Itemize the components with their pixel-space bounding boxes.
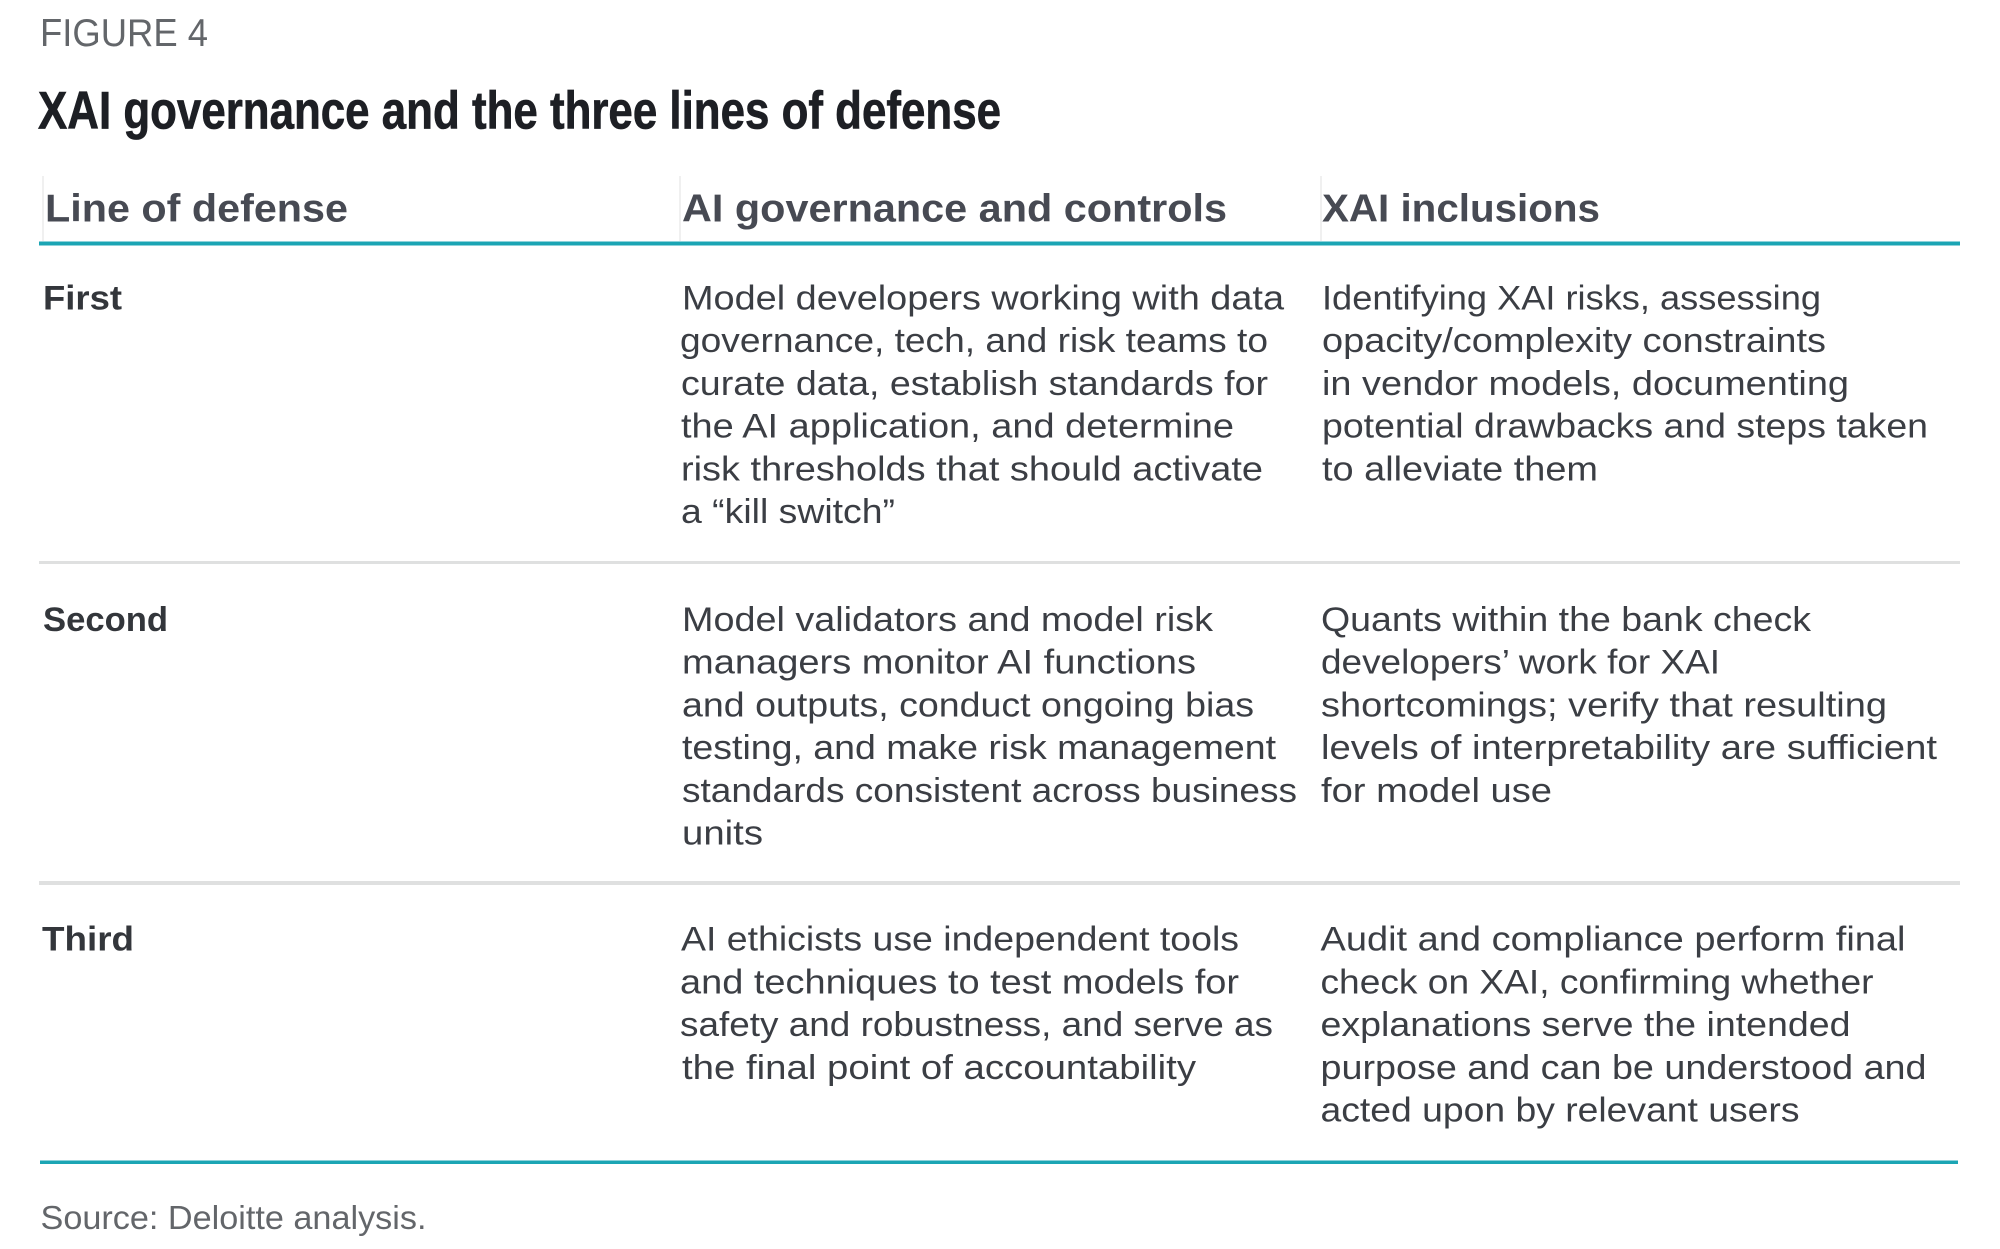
table header row: Line of defense [45,188,348,230]
table header row: XAI inclusions [1322,188,1600,230]
XAI inclusions text: first: potential drawbacks and steps taken [1322,408,1928,446]
AI governance text: third: and techniques to test models for [680,963,1239,1001]
XAI inclusions text: third: explanations serve the intended [1320,1006,1850,1044]
row: second line of defense [43,601,1938,852]
AI governance text: second: standards consistent across business [682,772,1297,810]
XAI inclusions text: first: in vendor models, documenting [1322,365,1849,403]
XAI inclusions text: first [1322,280,1928,488]
title: XAI governance and the three lines of defense [38,82,1001,140]
XAI inclusions text: first: opacity/complexity constraints [1322,322,1826,360]
XAI inclusions text: third [1320,921,1926,1130]
XAI inclusions text: second: for model use [1321,772,1552,810]
AI governance text: first: governance, tech, and risk teams to [680,322,1268,360]
AI governance text: second: units [682,814,763,852]
XAI inclusions text: second: levels of interpretability are sufficient [1321,729,1938,767]
XAI inclusions text: first: Identifying XAI risks, assessing [1322,280,1821,318]
table header row: AI governance and controls [682,188,1227,230]
AI governance text: first: a “kill switch” [681,493,895,531]
AI governance text: third: safety and robustness, and serve as [680,1006,1273,1044]
XAI inclusions text: second: Quants within the bank check [1321,601,1812,639]
AI governance text: third: the final point of accountability [682,1049,1196,1087]
AI governance text: third: AI ethicists use independent tools [681,921,1239,959]
row label: Second: Second [43,601,168,639]
AI governance text: second: testing, and make risk management [682,729,1277,767]
XAI inclusions text: third: purpose and can be understood and [1320,1049,1926,1087]
row label: Third: Third [42,921,134,959]
XAI inclusions text: second: developers’ work for XAI [1321,644,1720,682]
table header row [45,188,1600,230]
AI governance text: first: risk thresholds that should activate [681,450,1263,488]
XAI inclusions text: third: check on XAI, confirming whether [1320,963,1874,1001]
AI governance text: first: curate data, establish standards for [681,365,1268,403]
AI governance text: second: managers monitor AI functions [682,644,1196,682]
row: third line of defense [42,921,1926,1130]
XAI inclusions text: third: Audit and compliance perform final [1320,921,1906,959]
AI governance text: second: and outputs, conduct ongoing bias [682,686,1254,724]
XAI inclusions text: first: to alleviate them [1322,450,1598,488]
AI governance text: first: the AI application, and determine [681,408,1234,446]
row label: First: First [43,280,122,318]
row: first line of defense [43,280,1928,531]
AI governance text: second: Model validators and model risk [682,601,1214,639]
XAI inclusions text: second [1321,601,1938,810]
XAI inclusions text: third: acted upon by relevant users [1320,1092,1800,1130]
AI governance text: first [680,280,1284,531]
AI governance text: first: Model developers working with data [682,280,1284,318]
source note: Source: Deloitte analysis. [40,1199,427,1236]
AI governance text: third [680,921,1273,1087]
AI governance text: second [682,601,1297,852]
figure label: FIGURE 4 [40,12,208,55]
XAI inclusions text: second: shortcomings; verify that resulting [1321,686,1887,724]
